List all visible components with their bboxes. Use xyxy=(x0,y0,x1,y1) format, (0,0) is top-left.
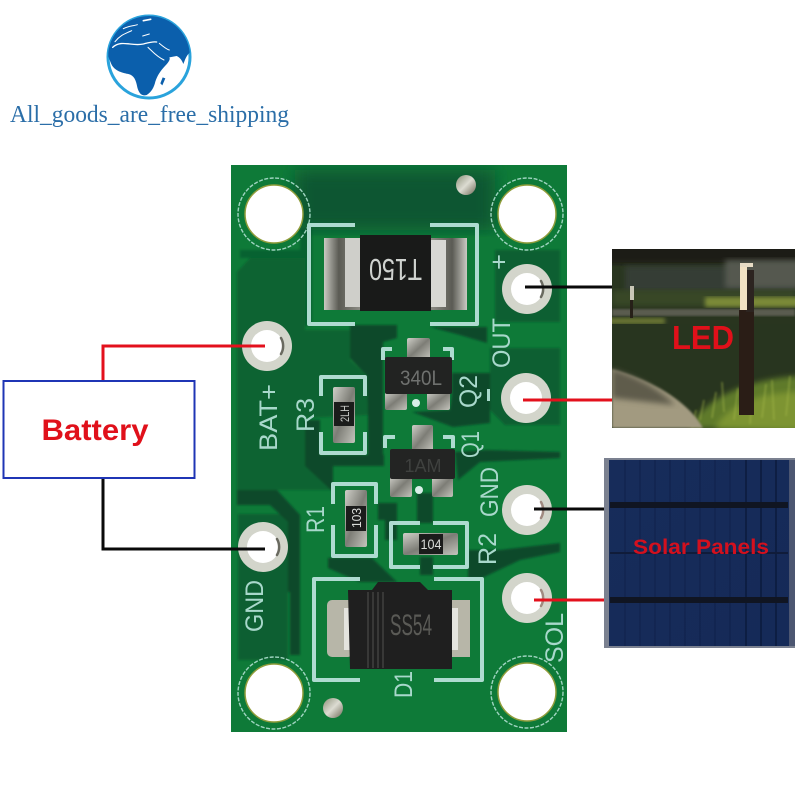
component: R3 resistor xyxy=(333,387,355,443)
label: R1: R1 xyxy=(302,506,330,533)
label: OUT: OUT xyxy=(488,318,516,368)
board silkscreen labels xyxy=(241,254,569,698)
panel: circuit board xyxy=(231,165,567,732)
silkscreen component outlines xyxy=(309,225,482,680)
wire: LED negative xyxy=(523,398,612,402)
component: 1AM transistor Q1: 1AM xyxy=(404,456,442,476)
component: R2 resistor: 104 xyxy=(420,536,442,552)
icon: globe xyxy=(107,13,197,98)
solar panel label: Solar Panels xyxy=(633,536,769,559)
label: Q2: Q2 xyxy=(455,375,483,408)
wire: battery negative xyxy=(103,479,265,549)
solder pads xyxy=(238,264,552,623)
label: D1: D1 xyxy=(390,671,418,698)
label: minus sign xyxy=(487,389,490,401)
battery box: Battery xyxy=(42,414,149,447)
component: T150 inductor xyxy=(324,235,467,311)
component: 340L transistor Q2: 340L xyxy=(400,367,442,390)
through-hole vias xyxy=(323,175,476,718)
label: plus sign: + xyxy=(485,254,513,270)
shop name: All_goods_are_free_shipping xyxy=(10,102,289,128)
wire: LED positive xyxy=(525,286,612,288)
component: 1AM transistor Q1 xyxy=(390,425,455,497)
component: SS54 diode D1: SS54 xyxy=(390,609,432,642)
photo: solar panel xyxy=(604,458,795,648)
logo: globe and shop name xyxy=(10,13,289,128)
label: R3: R3 xyxy=(292,398,320,432)
photo: LED garden light xyxy=(612,249,795,428)
component: R1 resistor: 103 xyxy=(349,508,364,528)
component: R1 resistor xyxy=(345,490,367,547)
label: GND left: GND xyxy=(241,580,269,632)
component: SS54 diode D1 xyxy=(327,582,470,669)
label: R2: R2 xyxy=(474,533,502,565)
component: R3 resistor: 2LH xyxy=(338,405,352,422)
label: BAT+: BAT+ xyxy=(255,384,283,451)
wire: battery positive xyxy=(103,346,265,380)
label: Q1: Q1 xyxy=(457,431,485,458)
wire: solar positive xyxy=(534,598,604,602)
component: 340L transistor Q2 xyxy=(385,338,452,410)
battery box xyxy=(4,381,194,478)
component: R2 resistor xyxy=(403,533,458,555)
wire: solar ground xyxy=(534,508,604,510)
label: GND right: GND xyxy=(476,467,504,517)
LED label: LED xyxy=(672,319,734,356)
component: T150 inductor: T150 xyxy=(369,252,422,287)
label: SOL: SOL xyxy=(541,613,569,663)
corner mounting holes xyxy=(238,178,563,729)
